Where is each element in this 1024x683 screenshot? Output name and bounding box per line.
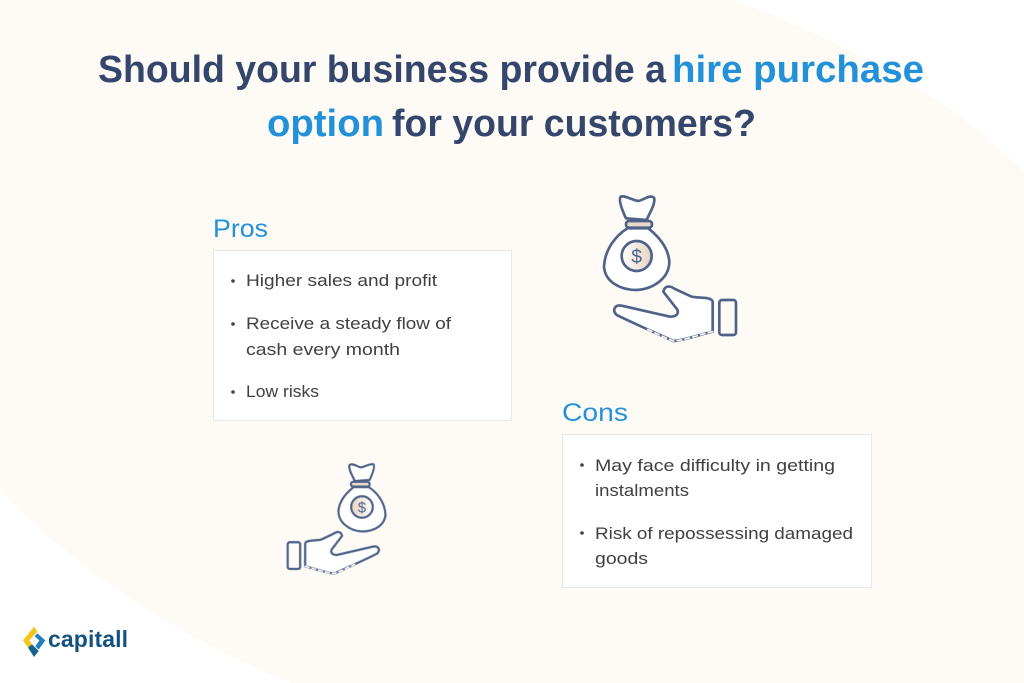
logo wordmark: capitall <box>48 626 128 652</box>
logo: capitall <box>23 626 128 657</box>
panel: cons <box>562 399 872 588</box>
cons list <box>580 456 853 568</box>
title: Should your business provide a <box>98 49 667 91</box>
cons list: May face difficulty in getting <box>595 456 835 475</box>
cons box <box>562 434 872 588</box>
logo mark <box>23 627 45 657</box>
cons list: goods <box>595 549 648 568</box>
title: for your customers? <box>392 103 756 145</box>
panel: pros <box>213 215 512 420</box>
icon: money bag over hand (small): $ <box>358 501 367 517</box>
cons list: instalments <box>595 481 689 500</box>
cons heading: Cons <box>562 399 628 427</box>
cons list: Risk of repossessing damaged <box>595 524 853 543</box>
pros list: Higher sales and profit <box>246 271 437 290</box>
icon: money bag over hand (large): $ <box>631 247 642 268</box>
icon: money bag over hand (large) <box>604 196 736 341</box>
pros list: Receive a steady flow of <box>246 314 451 333</box>
pros list <box>231 271 451 401</box>
pros heading: Pros <box>213 215 268 243</box>
pros box <box>214 250 512 420</box>
pros list: Low risks <box>246 382 319 401</box>
pros list: cash every month <box>246 340 400 359</box>
title <box>98 49 924 145</box>
title: hire purchase <box>672 49 924 91</box>
icon: money bag over hand (small) <box>288 464 386 573</box>
title: option <box>267 103 384 145</box>
